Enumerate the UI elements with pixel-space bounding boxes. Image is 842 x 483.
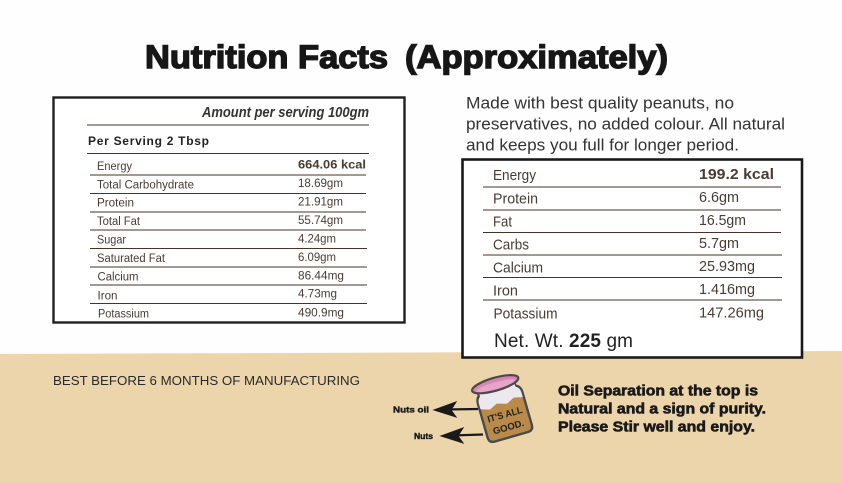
- row values: [699, 167, 774, 322]
- table heading: amount per serving: Amount per serving 100gm: [201, 105, 369, 121]
- row values: 21.91gm: [298, 196, 343, 208]
- row values: 4.24gm: [298, 233, 336, 245]
- panel: nutrition per serving: [462, 160, 802, 358]
- row labels: Carbs: [493, 237, 529, 253]
- title: (Approximately): [405, 39, 668, 75]
- row labels: Saturated Fat: [97, 253, 166, 265]
- row values: 86.44mg: [298, 270, 344, 282]
- tan footer band: [0, 351, 842, 483]
- table rules: [483, 187, 782, 300]
- arrow: nuts: [441, 428, 483, 443]
- row labels: Energy: [97, 161, 132, 173]
- panel: nutrition per 100gm: [54, 98, 404, 322]
- row labels: Protein: [493, 191, 538, 207]
- row values: 1.416mg: [699, 282, 755, 298]
- row values: 55.74gm: [298, 215, 343, 227]
- icon: peanut butter jar: [470, 371, 533, 444]
- net weight: Net. Wt. 225 gm: [494, 331, 633, 352]
- row labels: [493, 168, 558, 322]
- row values: 664.06 kcal: [298, 157, 366, 171]
- row values: 147.26mg: [699, 306, 764, 322]
- row values: 490.9mg: [298, 308, 344, 320]
- description paragraph: [466, 94, 785, 154]
- row values: 16.5gm: [699, 213, 746, 229]
- row values: 199.2 kcal: [699, 167, 774, 183]
- table subheading: per serving: Per Serving 2 Tbsp: [88, 134, 209, 148]
- row values: 25.93mg: [699, 259, 755, 275]
- row values: 5.7gm: [699, 236, 739, 252]
- row labels: [97, 161, 194, 321]
- description paragraph: and keeps you full for longer period.: [466, 136, 739, 154]
- label: nuts oil: Nuts oil: [393, 406, 429, 414]
- row labels: Fat: [493, 215, 512, 231]
- row labels: Potassium: [494, 306, 558, 322]
- row values: 4.73mg: [298, 289, 337, 301]
- jar label: IT'S ALL: [486, 405, 524, 425]
- row values: 6.09gm: [298, 252, 336, 264]
- oil separation note: Natural and a sign of purity.: [558, 402, 766, 418]
- row labels: Energy: [493, 168, 537, 184]
- arrow: nuts oil: [434, 402, 478, 417]
- row labels: Protein: [97, 198, 134, 210]
- row values: [298, 157, 366, 320]
- oil separation note: [558, 384, 766, 436]
- best before note: BEST BEFORE 6 MONTHS OF MANUFACTURING: [53, 373, 360, 388]
- label: nuts: Nuts: [414, 432, 434, 441]
- row values: 6.6gm: [699, 190, 739, 206]
- row labels: Total Carbohydrate: [97, 179, 194, 191]
- row labels: Sugar: [97, 234, 126, 246]
- description paragraph: preservatives, no added colour. All natural: [466, 114, 785, 134]
- description paragraph: Made with best quality peanuts, no: [466, 94, 734, 112]
- row labels: Iron: [493, 284, 518, 300]
- row labels: Iron: [98, 290, 118, 302]
- title: [145, 39, 668, 75]
- table rules: [87, 125, 369, 304]
- row labels: Calcium: [98, 272, 138, 284]
- row labels: Calcium: [493, 260, 543, 276]
- row labels: Total Fat: [97, 216, 141, 228]
- row labels: Potassium: [98, 309, 149, 321]
- jar label: [486, 405, 528, 438]
- jar label: GOOD.: [492, 418, 526, 437]
- row values: 18.69gm: [298, 178, 343, 190]
- title: Nutrition Facts: [145, 39, 388, 75]
- oil separation note: Oil Separation at the top is: [558, 384, 758, 400]
- oil separation note: Please Stir well and enjoy.: [558, 420, 755, 436]
